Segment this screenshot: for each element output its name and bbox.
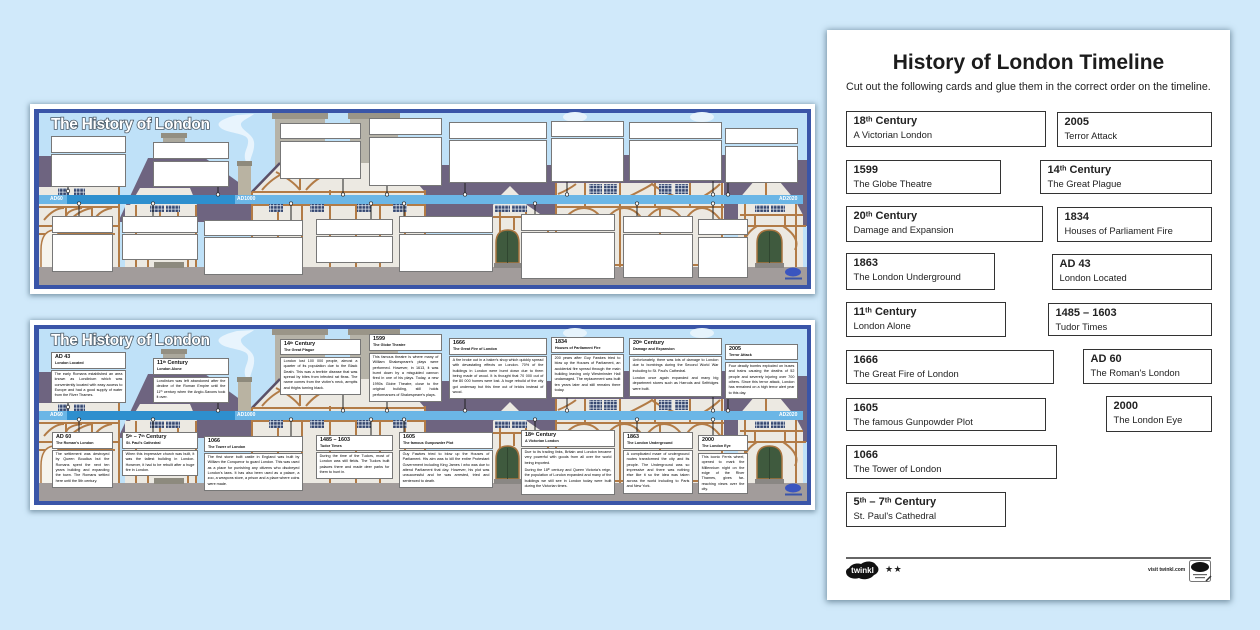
event card: 1666: 1666 xyxy=(453,340,465,346)
blank card 3 xyxy=(280,123,361,179)
cut-out card: 14th Century: 14th Century xyxy=(1048,164,1111,176)
event card: 1066 xyxy=(204,436,303,491)
event card: 1863: A complicated maze of underground routes transformed the city and its people. The Underground was so impressive and there was nothing else like it so the idea was taken across the world including to Paris and New York. xyxy=(627,452,689,488)
cut-out card: 1834: 1834 xyxy=(1064,211,1089,223)
event card: AD 60 xyxy=(52,432,113,488)
cut-out card: 1599: 1599 xyxy=(854,164,878,176)
event card: 1605 xyxy=(399,432,493,488)
blank card 1 xyxy=(51,136,126,187)
cut-out card: 2005: 2005 xyxy=(1064,116,1089,128)
cut-out card: 1834: Houses of Parliament Fire xyxy=(1064,225,1173,236)
event card: 11th Century: Londinium was left abandoned after the decline of the Roman Empire until the 11th century when the Anglo-Saxons took it over. xyxy=(157,379,225,399)
event card: AD 43 xyxy=(51,352,126,403)
illustration: London street with timeline bar and title xyxy=(34,325,811,505)
event card: 18th Century: A Victorian London xyxy=(525,439,559,443)
event card: 1834: 200 years after Guy Fawkes tried to blow up the Houses of Parliament, an accidental fire spread through the main building leaving only Westminster Hall undamaged. The replacement was built ten years later and still remains there today. xyxy=(555,356,620,392)
blank card 12 xyxy=(316,219,393,263)
event card: 1605: The famous Gunpowder Plot xyxy=(403,441,453,445)
panel: blank timeline poster xyxy=(30,104,815,294)
event card: 11th Century: 11th Century xyxy=(157,359,188,366)
cut-out card: 1485-1603 xyxy=(1048,303,1212,336)
event card: 18th Century xyxy=(521,430,615,495)
event card: 1666: The Great Fire of London xyxy=(453,347,497,351)
cut-out card: 5th-7th Century xyxy=(846,492,1006,527)
cut-out card: AD 43 xyxy=(1052,254,1212,290)
cut-out card: 1066 xyxy=(846,445,1057,479)
event card: 2005: Four deadly bombs exploded on buses and trains causing the deaths of 52 people and severely injuring over 700 others. Since this terror attack, London has remained on a high terror alert year to this day. xyxy=(729,364,794,395)
cut-out card: 1666: The Great Fire of London xyxy=(854,368,959,379)
illustration: London street with timeline bar: The History of London xyxy=(51,116,210,133)
event card: 1605: Guy Fawkes tried to blow up the Houses of Parliament. His aim was to kill the entire Protestant Government including King James I who was due to attend Parliament that day. However, his plot was unsuccessful and he was arrested, tried and sentenced to death. xyxy=(403,452,489,483)
event card: 2005: Terror Attack xyxy=(729,353,752,357)
blank card 10 xyxy=(122,216,198,260)
cut-out card: 11th Century xyxy=(846,302,1006,337)
event card: 1066: 1066 xyxy=(208,438,220,444)
event card: 1605: 1605 xyxy=(403,434,415,440)
event card: 1834: Houses of Parliament Fire xyxy=(555,346,600,350)
event card: 18th Century: Due to its trading links, Britain and London became very powerful with goods from all over the world being imported. xyxy=(525,450,611,464)
cut-out card: 2005 xyxy=(1057,112,1212,147)
icon: quality badge xyxy=(1189,560,1212,582)
event card: 5th-7th Century: When this impressive church was built, it was the tallest building in London. However, it had to be rebuilt after a huge fire in London. xyxy=(126,452,194,472)
instruction text: Cut out the following cards and glue them in the correct order on the timeline. xyxy=(846,81,1211,93)
cut-out card: 2000: 2000 xyxy=(1114,400,1138,412)
event card: 14th Century: The Great Plague xyxy=(284,348,314,352)
cut-out card: 18th Century: 18th Century xyxy=(854,115,917,127)
cut-out card: 1834 xyxy=(1057,207,1212,242)
event card: 5th-7th Century xyxy=(122,432,198,476)
cut-out card: 2000: The London Eye xyxy=(1114,414,1182,425)
cut-out card: 14th Century xyxy=(1040,160,1212,194)
event card: 11th Century: London Alone xyxy=(157,367,182,371)
cut-out card: AD 43: London Located xyxy=(1060,272,1127,283)
blank card 13 xyxy=(399,216,493,272)
event card: 20th Century xyxy=(629,338,722,397)
cut-out card: AD 60 xyxy=(1083,349,1212,384)
event card: 2000: This iconic Ferris wheel, opened to mark the Millennium night on the edge of the River Thames, gives far-reaching views over the city. xyxy=(702,455,744,491)
difficulty stars: ★★ xyxy=(885,565,902,575)
blank card 16 xyxy=(698,219,748,278)
blank card 9 xyxy=(52,216,113,272)
cut-out card: 2005: Terror Attack xyxy=(1064,130,1117,141)
event card: 18th Century: 18th Century xyxy=(525,431,556,438)
event card: 1485-1603: During the time of the Tudors, most of London was still fields. The Tudors built palaces there and made deer parks for them to hunt in. xyxy=(320,454,389,474)
event card: 1599: The Globe Theatre xyxy=(373,343,405,347)
event card: 1599: 1599 xyxy=(373,336,385,342)
event card: 1485-1603: 1485 – 1603 xyxy=(320,436,350,442)
event card: 11th Century xyxy=(153,358,229,403)
event card: 1863 xyxy=(623,432,693,494)
cut-out card: 18th Century: A Victorian London xyxy=(854,129,932,140)
illustration: London street with timeline bar xyxy=(34,109,811,289)
event card: 1599: This famous theatre is where many of William Shakespeare's plays were performed. However, in 1613, it was burnt down by a misguided cannon fired in one of his plays. Today, a new 1990s Globe Theatre, close to the original building, still holds performances of Shakespeare's plays. xyxy=(373,355,438,397)
illustration: London street with timeline bar: AD2020 xyxy=(779,196,798,202)
cut-out card: 1863 xyxy=(846,253,995,290)
event card: 1066: The Tower of London xyxy=(208,445,245,449)
event card: 2005 xyxy=(725,344,798,399)
event card: 18th Century: During the 18th century and Queen Victoria's reign, the population of London expanded and many of the buildings we still see in London today were built during the Victorian times. xyxy=(525,468,611,488)
event card: 5th-7th Century: St. Paul's Cathedral xyxy=(126,441,160,445)
blank card 4 xyxy=(369,118,442,186)
cut-out card: 14th Century: The Great Plague xyxy=(1048,178,1122,189)
event card: 2000: 2000 xyxy=(702,436,714,442)
event card: 1666: A fire broke out in a baker's shop which quickly spread with devastating effects on London. 70% of the buildings in London were burnt down due to them being made of wood. It is thought that 70 000 out of the 80 000 homes were lost. A huge rebuild of the city got underway but this time out of bricks instead of wood. xyxy=(453,358,543,394)
illustration: London street with timeline bar and title: AD2020 xyxy=(779,412,798,418)
blank card 15 xyxy=(623,216,693,278)
illustration: London street with timeline bar: AD60 xyxy=(50,196,63,202)
blank card 6 xyxy=(551,121,624,182)
cut-out card: 1599: The Globe Theatre xyxy=(854,178,932,189)
cut-out card: 1605: The famous Gunpowder Plot xyxy=(854,416,973,427)
cut-out card: 1485-1603: Tudor Times xyxy=(1056,321,1107,332)
cut-out card: 11th Century: 11th Century xyxy=(854,306,917,318)
cut-out card: 1599 xyxy=(846,160,1001,194)
event card: 1485-1603: Tudor Times xyxy=(320,444,342,448)
panel: worksheet page xyxy=(827,30,1230,600)
cut-out card: 20th Century xyxy=(846,206,1043,242)
cut-out card: 1066: 1066 xyxy=(854,449,878,461)
cut-out card: AD 43: AD 43 xyxy=(1060,258,1091,270)
cut-out card: 1485-1603: 1485 – 1603 xyxy=(1056,307,1117,319)
illustration: London street with timeline bar: AD1000 xyxy=(237,196,256,202)
cut-out card: 1605 xyxy=(846,398,1046,431)
event card: 20th Century: London once again expanded and many big department stores such as Harrods and Selfridges were built. xyxy=(633,376,718,391)
event card: 20th Century: Unfortunately, there was lots of damage to London due to bombings during the Second World War including to St. Paul's Cathedral. xyxy=(633,358,718,372)
event card: AD 43: AD 43 xyxy=(55,354,70,360)
event card: 1599 xyxy=(369,334,442,402)
icon: twinkl logo xyxy=(846,562,878,580)
event card: 5th-7th Century: 5th – 7th Century xyxy=(126,433,166,440)
cut-out card: 1066: The Tower of London xyxy=(854,463,941,474)
blank card 11 xyxy=(204,220,303,275)
event card: AD 60: AD 60 xyxy=(56,434,71,440)
blank card 8 xyxy=(725,128,798,183)
illustration: London street with timeline bar and title: AD60 xyxy=(50,412,63,418)
event card: 20th Century: Damage and Expansion xyxy=(633,347,675,351)
event card: 1863: The London Underground xyxy=(627,441,672,445)
event card: 14th Century: London lost 100 000 people, almost a quarter of its population due to the Black Death. This was a terrible disease that was spread by bites from infected rat fleas. The name comes from the victim's neck, armpits and thighs turning black. xyxy=(284,359,357,390)
event card: AD 60: The Roman's London xyxy=(56,441,94,445)
cut-out card: 20th Century: Damage and Expansion xyxy=(854,224,954,235)
cut-out card: 20th Century: 20th Century xyxy=(854,210,917,222)
event card: 14th Century: 14th Century xyxy=(284,340,315,346)
event card: 1834 xyxy=(551,337,624,398)
event card: AD 43: The early Romans established an area known as Londinium which was conveniently located with easy access to Europe and had a good supply of water from the River Thames. xyxy=(55,372,122,397)
event card: AD 43: London Located xyxy=(55,361,84,365)
cut-out card: AD 60: The Roman's London xyxy=(1090,367,1180,378)
event card: 2005: 2005 xyxy=(729,346,741,352)
illustration: London street with timeline bar and title: The History of London xyxy=(51,332,210,349)
event card: 1485-1603 xyxy=(316,435,393,479)
icon: twinkl logo: twinkl xyxy=(851,566,874,575)
event card: 1834: 1834 xyxy=(555,338,567,344)
illustration: London street with timeline bar and title: AD1000 xyxy=(237,412,256,418)
event card: AD 60: The settlement was destroyed by Queen Boudica but the Romans spent the next ten years building and expanding the town. The Romans settled here until the 5th century. xyxy=(56,452,109,483)
event card: 2000 xyxy=(698,435,748,494)
cut-out card: 1863: 1863 xyxy=(854,257,878,269)
event card: 1666 xyxy=(449,338,547,399)
blank card 2 xyxy=(153,142,229,187)
panel: completed timeline poster xyxy=(30,320,815,510)
cut-out card: 2000 xyxy=(1106,396,1212,432)
cut-out card: 5th-7th Century: St. Paul's Cathedral xyxy=(854,510,936,521)
website text: visit twinkl.com xyxy=(1148,567,1185,573)
blank card 14 xyxy=(521,214,615,279)
cut-out card: 5th-7th Century: 5th – 7th Century xyxy=(854,496,936,508)
blank card 5 xyxy=(449,122,547,183)
event card: 1066: The first stone built castle in England was built by William the Conqueror to guard London. This was used as a place for punishing any citizens who disobeyed London's laws. It has also been used as a palace, a zoo, a weapons store, a prison and a place where coins were made. xyxy=(208,455,299,486)
blank card 7 xyxy=(629,122,722,181)
cut-out card: 1666 xyxy=(846,350,1054,384)
footer rule xyxy=(846,557,1211,559)
event card: 2000: The London Eye xyxy=(702,444,731,448)
cut-out card: 18th Century xyxy=(846,111,1046,147)
cut-out card: 1666: 1666 xyxy=(854,354,878,366)
cut-out card: 1605: 1605 xyxy=(854,402,878,414)
event card: 14th Century xyxy=(280,339,361,395)
heading: worksheet title: History of London Timeline xyxy=(893,51,1164,74)
cut-out card: AD 60: AD 60 xyxy=(1090,353,1122,365)
cut-out card: 1863: The London Underground xyxy=(854,271,961,282)
event card: 1863: 1863 xyxy=(627,434,639,440)
event card: 20th Century: 20th Century xyxy=(633,339,664,346)
cut-out card: 11th Century: London Alone xyxy=(854,320,911,331)
